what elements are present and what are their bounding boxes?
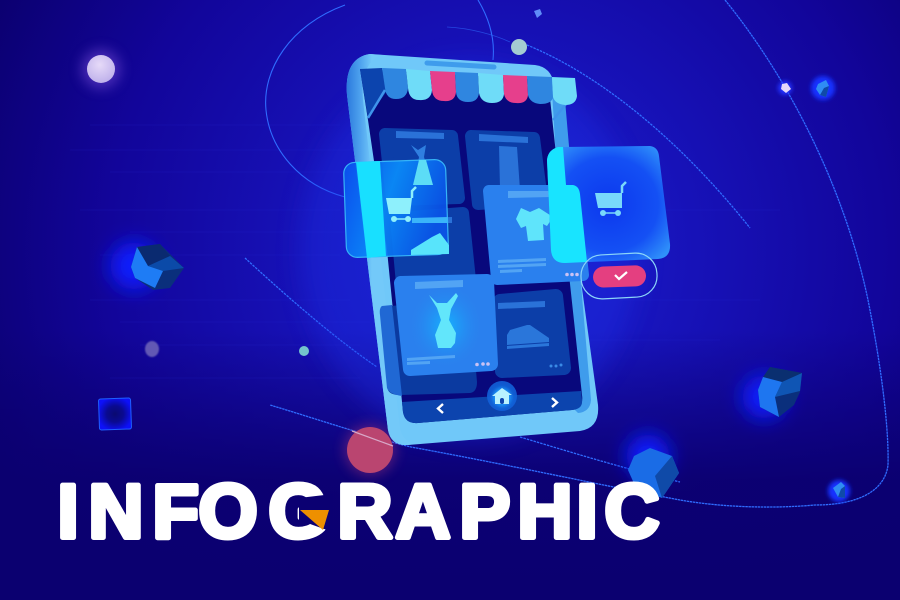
crystal: blue top right <box>811 76 835 100</box>
product card: dress <box>401 280 491 370</box>
square tile <box>98 398 132 430</box>
letter notch <box>299 494 333 530</box>
phone <box>347 54 598 445</box>
icon: cart <box>386 187 416 222</box>
arrow: forward <box>552 398 557 407</box>
cube: left <box>110 242 184 290</box>
orbit lines <box>245 0 888 507</box>
phone screen <box>360 69 582 423</box>
cube: right <box>742 367 802 419</box>
tiny crystal top <box>534 9 542 18</box>
panel overlap with phone frame <box>547 147 587 263</box>
icon: cart <box>595 182 626 216</box>
dress seen through panel <box>413 160 433 185</box>
red sphere <box>344 424 396 476</box>
arrow: back <box>438 404 443 413</box>
right frame inner strip <box>552 90 591 413</box>
bottom navigation bar <box>402 391 582 423</box>
sphere: blurred <box>145 341 159 357</box>
panel overlap with phone frame <box>356 161 386 258</box>
crystal: blue bottom right <box>828 480 850 502</box>
shoe seen through panel <box>411 217 449 255</box>
cube: bottom <box>626 434 679 498</box>
sphere: lavender <box>81 49 121 89</box>
phone body <box>347 54 598 445</box>
product card: dress back <box>385 131 459 200</box>
glow behind phone <box>300 60 640 440</box>
title accent: orange wedge <box>300 510 329 530</box>
awning left fold <box>360 68 566 120</box>
product card: sneaker back <box>396 213 470 284</box>
glass panel: right cart <box>547 146 670 263</box>
title: INFOGRAPHIC <box>58 470 659 554</box>
product card: sneaker <box>498 296 564 371</box>
product card: trousers <box>471 134 542 204</box>
awning <box>382 68 577 105</box>
sphere: small teal <box>299 346 309 356</box>
product card: back left <box>380 300 477 396</box>
phone speaker <box>427 63 494 67</box>
phone side shading <box>347 54 414 445</box>
home button <box>487 381 517 411</box>
crystal: white <box>778 81 792 95</box>
confirm button <box>580 252 658 300</box>
product card: t-shirt <box>489 191 583 279</box>
glass panel: left cart <box>343 159 449 258</box>
sphere: teal top <box>511 39 527 55</box>
